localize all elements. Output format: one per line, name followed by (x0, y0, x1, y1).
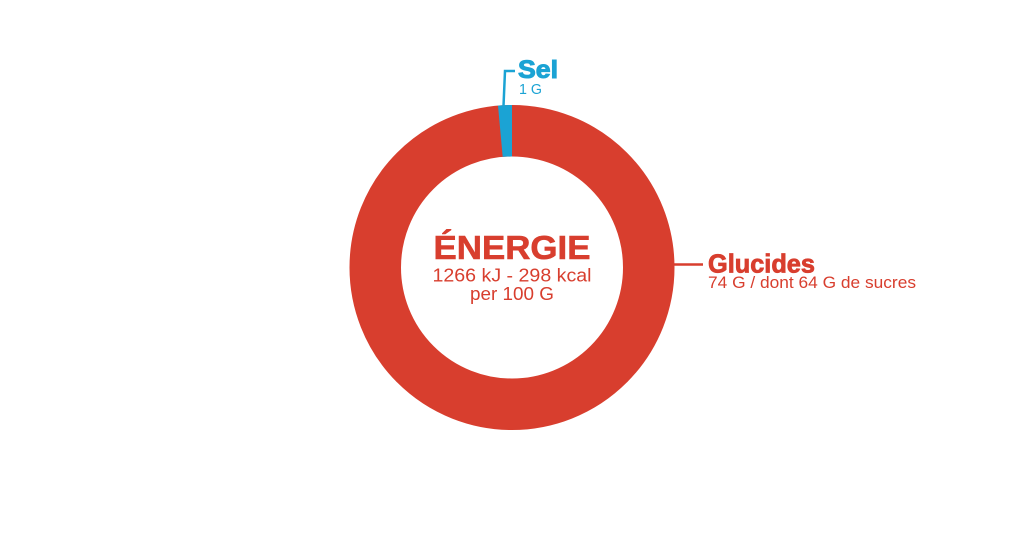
segment: sel (498, 105, 512, 157)
per 100 g: per 100 G (470, 284, 554, 304)
center label: énergie (432, 229, 592, 304)
heading: énergie: ÉNERGIE (434, 229, 590, 266)
label: sel: Sel (518, 56, 558, 84)
leader line: glucides (673, 263, 703, 266)
donut chart (375, 105, 649, 404)
callout: sel (504, 56, 558, 106)
value: 1 g: 1 G (519, 81, 542, 98)
value: 74 g dont 64 g de sucres: 74 G / dont 64 G de sucres (708, 273, 916, 292)
label: glucides: Glucides (708, 248, 815, 278)
segment: glucides (375, 131, 649, 404)
energy values: 1266 kJ - 298 kcal (432, 266, 592, 286)
callout: glucides (673, 248, 916, 292)
leader line: sel (504, 71, 515, 106)
